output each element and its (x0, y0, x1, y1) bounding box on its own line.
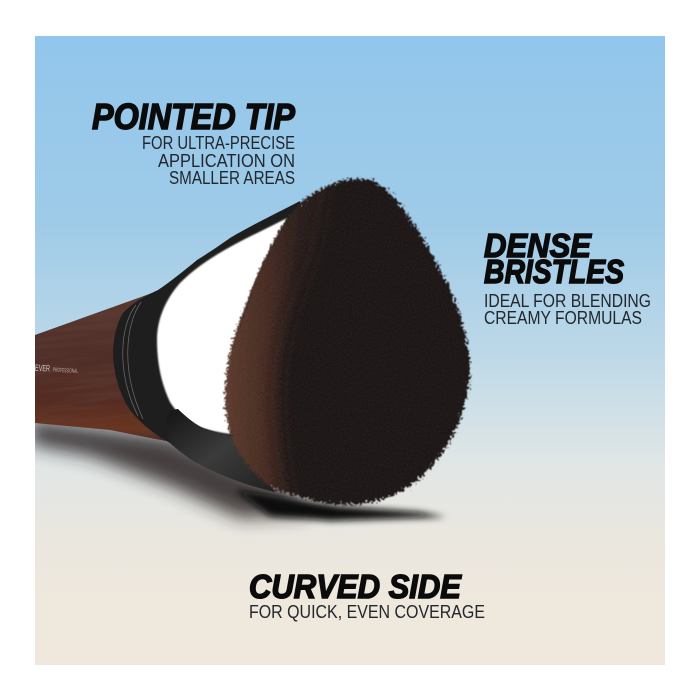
ferrule (113, 201, 306, 492)
heading: pointed tip: POINTED TIP (92, 96, 296, 137)
bristle texture (231, 180, 468, 504)
white reflection (157, 218, 287, 434)
dense bristles description: CREAMY FORMULAS (484, 308, 642, 328)
lower ferrule (166, 409, 275, 492)
heading: dense bristles: BRISTLES (484, 253, 624, 290)
ground shadow (30, 420, 446, 521)
dark bristle mass (265, 176, 472, 507)
pointed tip description (142, 133, 295, 188)
brush illustration (28, 170, 490, 530)
handle logo text: PROFESSIONAL (53, 368, 78, 375)
handle (35, 293, 166, 441)
heading: curved side: CURVED SIDE (249, 568, 462, 605)
pointed tip description: FOR ULTRA-PRECISE (142, 133, 295, 153)
curved side description: FOR QUICK, EVEN COVERAGE (249, 602, 485, 622)
heading: dense bristles: DENSE (484, 227, 592, 264)
handle logo text: EVER (35, 363, 51, 373)
bristle head (220, 176, 473, 507)
pointed tip description: APPLICATION ON (158, 151, 295, 171)
ferrule grooves (123, 302, 143, 419)
heading: pointed tip (92, 96, 296, 188)
pointed tip description: SMALLER AREAS (169, 168, 295, 188)
handle logo text (35, 364, 78, 373)
dense bristles description (484, 291, 651, 328)
heading: curved side (249, 568, 485, 622)
dense bristles description: IDEAL FOR BLENDING (484, 291, 651, 311)
heading: dense bristles (484, 227, 651, 328)
